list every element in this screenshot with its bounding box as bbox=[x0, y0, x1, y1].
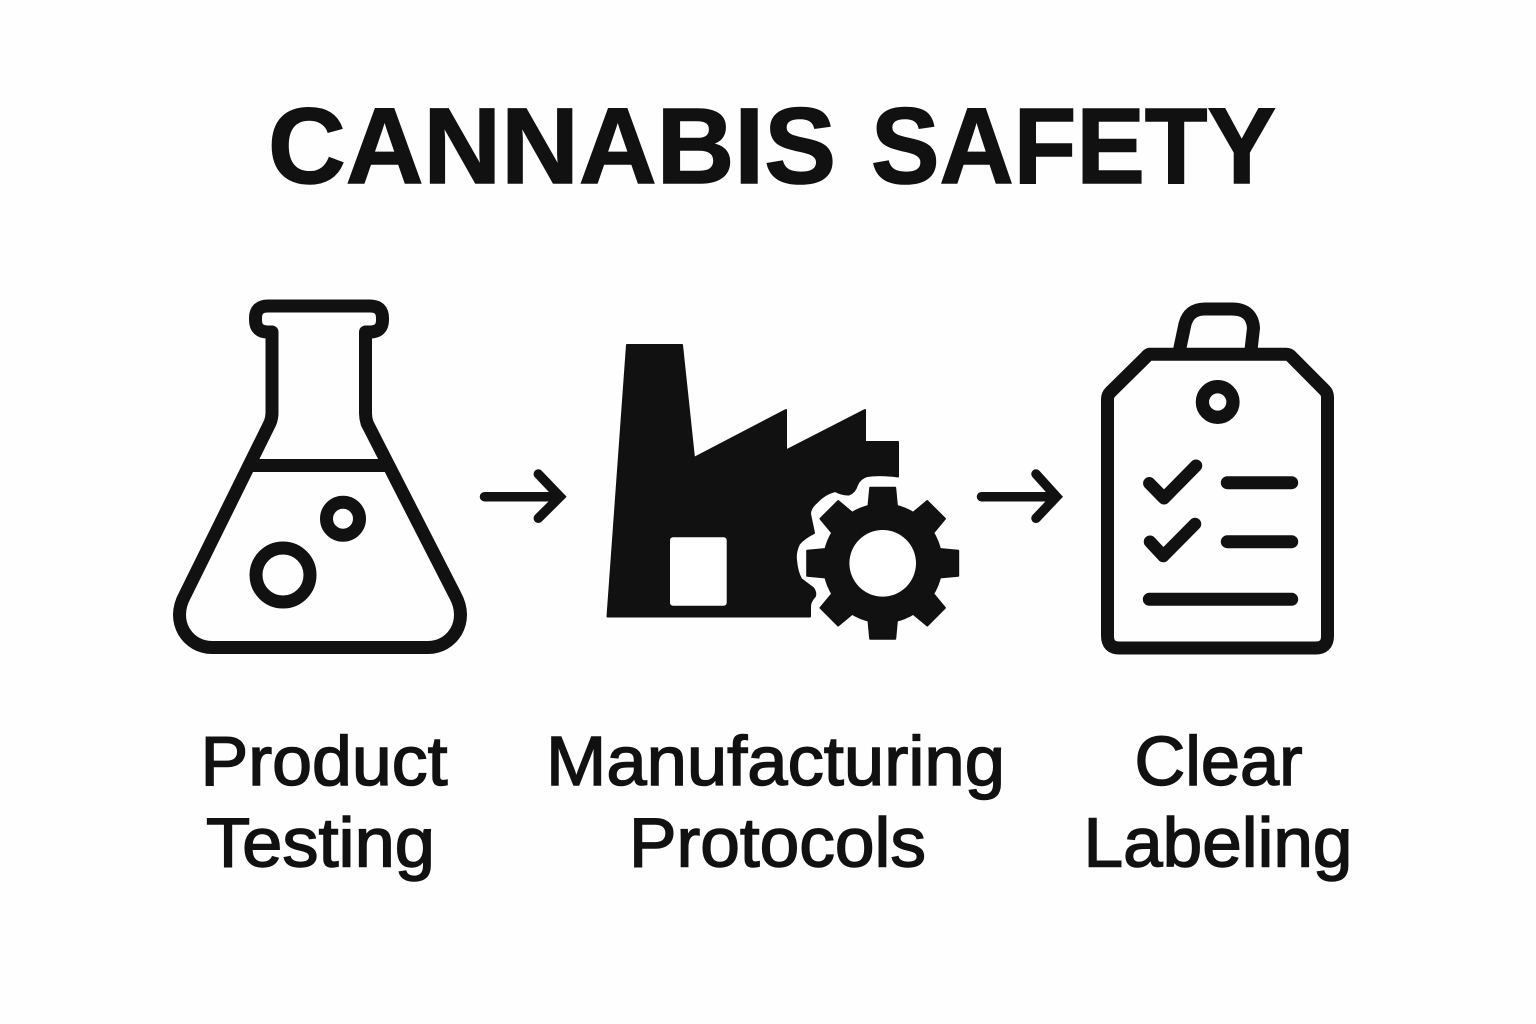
title: SAFETY bbox=[871, 85, 1276, 206]
label: clear labeling bbox=[1084, 722, 1352, 882]
label: clear labeling: Labeling bbox=[1084, 804, 1352, 882]
icon: factory with gear bbox=[608, 345, 958, 639]
title bbox=[268, 85, 1276, 206]
label: product testing: Product bbox=[200, 722, 448, 800]
arrow: testing to manufacturing bbox=[484, 474, 560, 518]
label: clear labeling: Clear bbox=[1134, 722, 1302, 800]
label: manufacturing protocols: Manufacturing bbox=[546, 722, 1005, 800]
icon: flask bbox=[180, 306, 460, 648]
label: manufacturing protocols bbox=[546, 722, 1005, 882]
icon: clipboard label bbox=[1108, 309, 1328, 648]
gear bbox=[807, 488, 958, 639]
label: product testing: Testing bbox=[206, 804, 435, 882]
title: CANNABIS bbox=[268, 85, 836, 206]
label: manufacturing protocols: Protocols bbox=[629, 804, 926, 882]
arrow: manufacturing to labeling bbox=[982, 474, 1056, 518]
label: product testing bbox=[200, 722, 448, 882]
